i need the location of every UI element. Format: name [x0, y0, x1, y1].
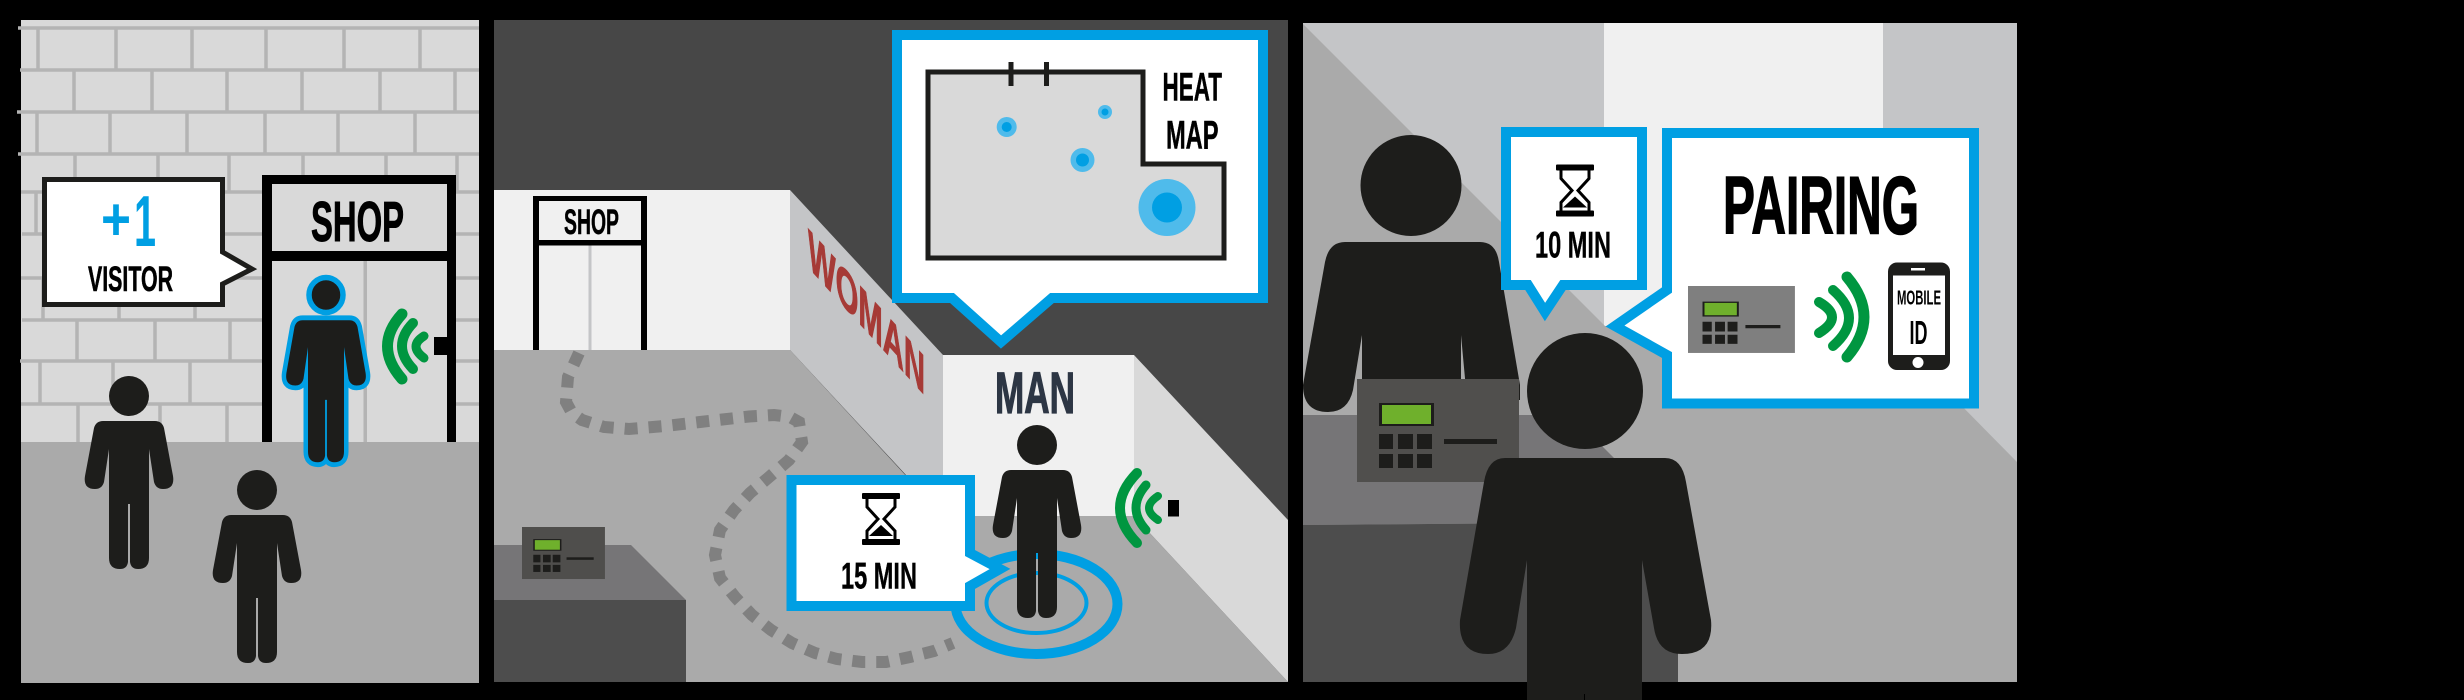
man aisle wall: [943, 355, 1134, 517]
icon: wireless signal: [1819, 277, 1864, 357]
icon: hourglass: [862, 493, 900, 545]
icon: wireless signal: [388, 314, 424, 379]
rear wall: [1604, 23, 1883, 327]
wait time: 10 MIN: [1535, 224, 1611, 266]
floor: [21, 442, 479, 683]
pairing heading: PAIRING: [1723, 160, 1919, 252]
visitor label: VISITOR: [88, 260, 173, 299]
map label: MAP: [1166, 114, 1218, 158]
man sign: MAN: [995, 361, 1075, 426]
callout: 10 min: [1506, 132, 1642, 312]
plus sign: +: [101, 186, 131, 253]
door sensor: [434, 337, 447, 355]
floor: [494, 350, 1288, 682]
count one: 1: [134, 182, 156, 262]
wall sensor: [1168, 500, 1179, 516]
right wall: [1134, 355, 1288, 682]
floor plan: [928, 72, 1224, 258]
brick wall: [17, 20, 479, 445]
heat spots: [997, 105, 1196, 236]
woman sign: WOMAN: [808, 217, 925, 408]
heat label: HEAT: [1162, 66, 1222, 110]
callout: 15 min: [792, 480, 1000, 606]
panel 2: store interior: [494, 20, 1288, 682]
panel 1: shop entrance: [17, 20, 479, 683]
floor: [1303, 24, 2017, 682]
mobile label: MOBILE: [1897, 288, 1941, 310]
payment terminal: [1357, 379, 1519, 482]
counter: [1303, 415, 1678, 682]
doorway ticks: [1011, 62, 1046, 86]
icon: wireless signal: [1120, 473, 1158, 543]
callout: pairing: [1615, 133, 1974, 404]
dark background: [494, 20, 1288, 682]
panel 3: checkout pairing: [1303, 23, 2017, 700]
dwell time: 15 MIN: [841, 556, 917, 596]
dashed visitor path: [566, 353, 953, 662]
small shop sign: SHOP: [564, 203, 619, 242]
icon: hourglass: [1556, 164, 1594, 216]
cashier: [1303, 135, 1520, 412]
callout: heat map: [897, 35, 1263, 342]
small shop door: [533, 196, 647, 350]
customer: [1460, 333, 1711, 700]
shop sign: SHOP: [311, 190, 404, 254]
rear wall: [494, 190, 790, 351]
side walls: [1303, 23, 2017, 682]
person centre: [213, 470, 301, 663]
highlighted visitor: [286, 278, 366, 462]
payment terminal: [522, 527, 605, 579]
terminal icon: [1688, 286, 1795, 353]
id label: ID: [1910, 314, 1928, 351]
shop door frame: [262, 175, 456, 442]
counter: [494, 545, 686, 682]
callout: +1 visitor: [44, 180, 252, 304]
person left: [85, 376, 173, 569]
icon: smartphone: [1888, 262, 1950, 370]
person standing: [993, 425, 1081, 618]
woman aisle wall: [790, 190, 943, 516]
dwell rings: [956, 554, 1118, 654]
